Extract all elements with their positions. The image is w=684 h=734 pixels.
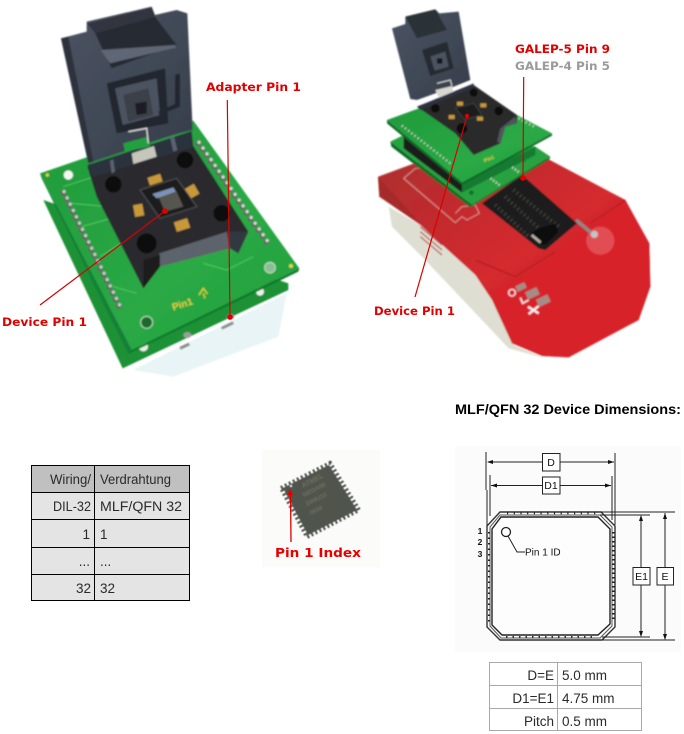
springs (133, 174, 199, 232)
heading: device dimensions: MLF/QFN 32 Device Dimensions: (455, 402, 681, 417)
dimensional drawing: Pin 1 ID (525, 548, 561, 558)
photo: device chip (262, 450, 380, 567)
socket base (87, 143, 248, 288)
status icons (509, 289, 515, 296)
dimensional drawing: 2 (478, 537, 483, 547)
wiring table: 1 (100, 527, 108, 542)
hinge (87, 131, 193, 177)
toggle (586, 227, 614, 255)
callout: adapter pin 1: Adapter Pin 1 (206, 80, 301, 94)
package outline (487, 512, 615, 640)
open lid (61, 7, 193, 163)
lower board (390, 135, 550, 205)
device nest (140, 178, 197, 218)
pin rows (63, 193, 122, 312)
callout: GALEP pins: GALEP-4 Pin 5 (515, 59, 610, 73)
photo: programmer with adapter (378, 9, 650, 358)
photo: device chip: 20MU10 (305, 492, 329, 508)
dimensional drawing: 3 (478, 549, 483, 559)
dimensions table: D1=E1 (512, 691, 554, 706)
silkscreen: Pin1 (483, 155, 495, 164)
callout: pin 1 index (275, 489, 361, 560)
status lights (515, 282, 527, 292)
shadow tint under board (133, 293, 287, 377)
photo: adapter with open socket (40, 7, 299, 377)
dimensions table: 0.5 mm (562, 714, 607, 729)
leads (507, 512, 596, 514)
D1 dimension (491, 484, 542, 486)
dimensional drawing: E (661, 571, 669, 583)
top circuit board (40, 121, 299, 350)
wiring table: ... (100, 554, 111, 569)
callout: pin 1 index: Pin 1 Index (275, 545, 361, 560)
adapter socket (417, 85, 517, 155)
photo: device chip: ATMEL (301, 473, 326, 490)
arrowheads (487, 460, 667, 640)
callout: GALEP pins (515, 42, 610, 181)
dimensions table: D=E (527, 668, 554, 683)
open lid (392, 9, 470, 100)
dimensional drawing: E1 (635, 571, 648, 583)
wiring table: ... (79, 554, 90, 569)
E dimension (664, 513, 666, 567)
photo: device chip: 0634 (309, 505, 324, 517)
callout: device pin 1 left: Device Pin 1 (2, 315, 87, 329)
light base of programmer (389, 207, 545, 358)
dimensions table: 5.0 mm (562, 668, 607, 683)
pin 1 id (502, 528, 510, 536)
dimensional drawing: D (547, 457, 555, 469)
wiring table: 32 (100, 581, 115, 596)
red body (378, 159, 650, 357)
E1 dimension (640, 516, 642, 567)
wiring table: MLF/QFN 32 (100, 499, 182, 514)
wiring table: Verdrahtung (100, 472, 171, 487)
photo: device chip: MEGA88 (302, 482, 327, 499)
callout: device pin 1 right (374, 114, 469, 318)
wiring table: Wiring/ (50, 472, 91, 487)
dimensional drawing: D1 (544, 480, 558, 492)
dimensions table: Pitch (524, 714, 554, 729)
top board (387, 108, 552, 183)
callout: GALEP pins: GALEP-5 Pin 9 (515, 42, 610, 56)
callout: adapter pin 1 (206, 80, 301, 320)
wiring table: 1 (82, 527, 90, 542)
dimensions table: 4.75 mm (562, 691, 615, 706)
silkscreen: Pin1 (171, 296, 195, 314)
callout: device pin 1 left (2, 208, 168, 329)
dimensional drawing: 1 (478, 526, 483, 536)
wiring table: 32 (76, 581, 91, 596)
dimensions table (489, 662, 642, 731)
extension lines (485, 452, 487, 490)
dimensional drawing (455, 446, 681, 652)
callout: device pin 1 right: Device Pin 1 (374, 304, 455, 318)
dimension labels (542, 454, 674, 585)
lower circuit board (43, 200, 288, 368)
connector block between boards (404, 135, 462, 193)
D dimension (488, 461, 542, 463)
wiring table (31, 465, 190, 600)
board holes (64, 170, 73, 180)
ZIF socket (482, 175, 577, 250)
solder pins under the board (139, 288, 264, 351)
wiring table: DIL-32 (53, 499, 91, 514)
